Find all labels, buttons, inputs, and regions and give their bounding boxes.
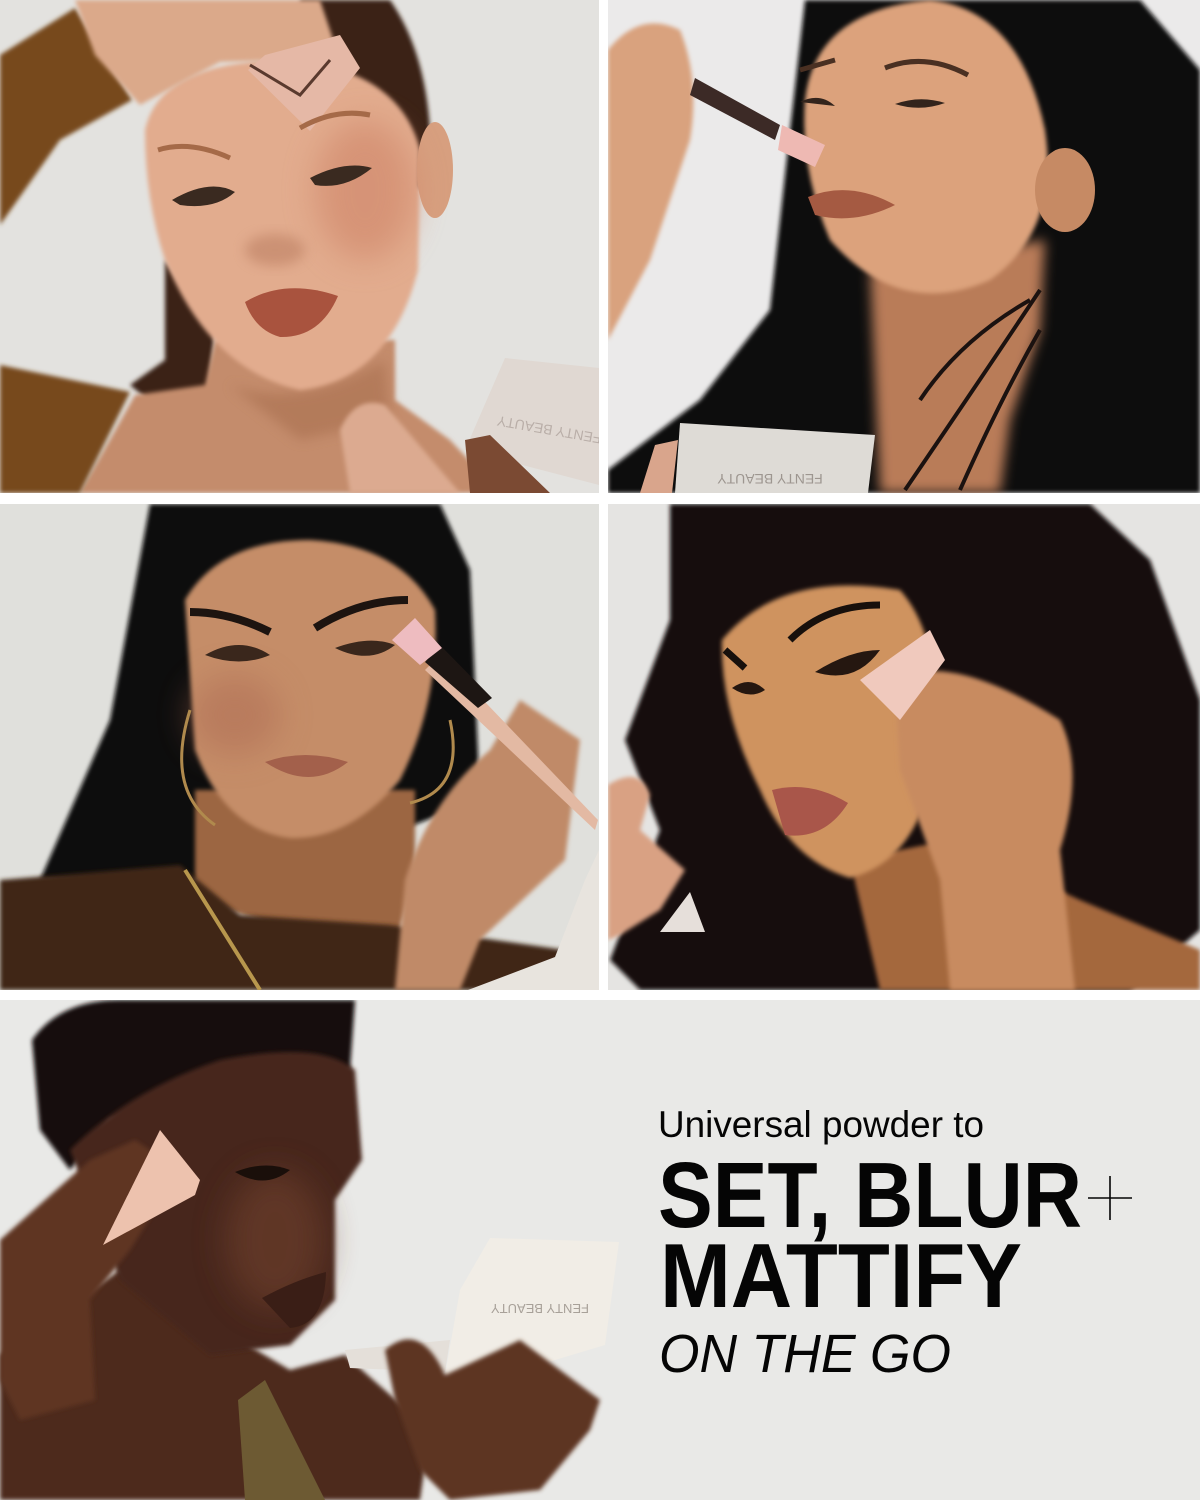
brush tip bbox=[778, 125, 825, 167]
lips bbox=[262, 1272, 326, 1328]
sponge bbox=[103, 1130, 200, 1245]
eyes bbox=[732, 650, 880, 695]
ear bbox=[1035, 148, 1095, 232]
nose shadow bbox=[245, 234, 305, 266]
sponge bbox=[248, 35, 360, 131]
dark lower right hand bbox=[465, 435, 550, 493]
face bbox=[722, 586, 937, 878]
olive top strap bbox=[238, 1380, 325, 1500]
lower fingers bbox=[640, 440, 678, 493]
hoop earrings bbox=[182, 710, 453, 825]
neck bbox=[870, 240, 1045, 493]
neck shadow bbox=[246, 364, 390, 439]
dark brown top bbox=[0, 865, 565, 990]
blush bbox=[315, 120, 415, 260]
hand on forehead bbox=[75, 0, 335, 105]
brush ferrule bbox=[425, 645, 492, 708]
face bbox=[145, 60, 420, 390]
sponge bbox=[860, 630, 945, 720]
subheading: Universal powder to bbox=[658, 1104, 984, 1145]
loose hair strands across chest bbox=[905, 290, 1040, 490]
ear bbox=[417, 122, 453, 218]
compact base bbox=[345, 1340, 450, 1372]
face bbox=[804, 0, 1048, 293]
headline line one: SET, BLUR bbox=[658, 1143, 1082, 1247]
panel: model four with sponge on cheek bbox=[608, 504, 1200, 990]
compact brand text: FENTY BEAUTY bbox=[717, 471, 823, 487]
holding hand bbox=[385, 1339, 600, 1500]
gold necklace bbox=[185, 870, 260, 990]
lips bbox=[808, 190, 895, 218]
brows bbox=[158, 113, 370, 158]
eyes bbox=[205, 641, 395, 662]
hair bbox=[130, 0, 430, 425]
compact brand text: FENTY BEAUTY bbox=[495, 413, 602, 447]
hair bbox=[608, 0, 1200, 493]
compact bbox=[468, 850, 599, 990]
panel: model two with brush at nose bbox=[608, 0, 1200, 493]
hand on cheek bbox=[895, 671, 1075, 990]
blush bbox=[190, 675, 280, 755]
panel: model three with brush at temple bbox=[0, 504, 599, 990]
panel: bottom with model five and headline bbox=[0, 1000, 1200, 1500]
compact bbox=[465, 358, 599, 485]
compact bbox=[675, 423, 875, 493]
fingers bbox=[340, 403, 460, 493]
brush bbox=[690, 78, 780, 140]
fingers at left bbox=[608, 777, 685, 940]
body and shoulders bbox=[0, 1270, 430, 1500]
compact brand text: FENTY BEAUTY bbox=[491, 1301, 589, 1316]
hair bbox=[32, 1000, 355, 1170]
brush handle bbox=[425, 655, 598, 830]
hair bbox=[40, 504, 480, 880]
lips bbox=[772, 787, 848, 836]
plus sign bbox=[1088, 1176, 1132, 1220]
face bbox=[185, 540, 436, 838]
cheek highlight bbox=[225, 1170, 325, 1310]
brows and eye lines bbox=[725, 605, 880, 668]
headline line two: MATTIFY bbox=[660, 1226, 1022, 1327]
raised hand bbox=[0, 1140, 180, 1420]
hair bbox=[610, 504, 1200, 990]
neck bbox=[192, 787, 418, 930]
eyes and brows bbox=[800, 98, 945, 108]
neck and shoulder bbox=[850, 840, 1200, 990]
brown sleeve and top bbox=[0, 8, 132, 493]
brush tip bbox=[392, 618, 442, 665]
hand bbox=[395, 700, 580, 990]
tagline: ON THE GO bbox=[659, 1324, 951, 1384]
lips bbox=[245, 288, 338, 337]
raised hand and arm bbox=[608, 23, 693, 340]
face and head bbox=[70, 1052, 362, 1355]
lips bbox=[265, 755, 348, 777]
compact corner bbox=[660, 892, 705, 932]
eye bbox=[235, 1165, 290, 1181]
brows bbox=[190, 600, 408, 632]
compact bbox=[445, 1238, 619, 1375]
sponge press lines bbox=[250, 60, 330, 95]
eyes bbox=[172, 166, 372, 206]
neck and chest bbox=[80, 340, 500, 493]
panel: model one pressing sponge to forehead bbox=[0, 0, 602, 493]
